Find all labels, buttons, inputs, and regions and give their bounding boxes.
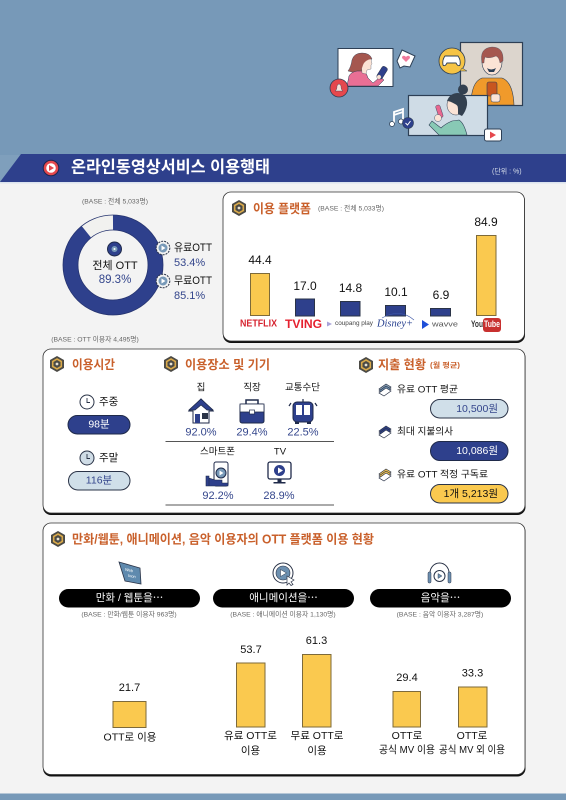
logo: Wavve [422,320,458,329]
icon: clock weekday [80,395,94,409]
max willingness value: 10,086원 [456,445,498,457]
icon: house [189,399,213,423]
bar chart: music: 33.3 [462,668,483,680]
logo: Netflix: NETFLIX [240,318,277,330]
icon: webtoon: toon [128,573,136,579]
icon: money [379,469,391,481]
paid average label: 유료 OTT 평균 [397,384,458,396]
bar chart: 10.1 [384,285,408,299]
bar chart: animation: 유료 OTT로 [224,730,277,742]
bar chart: webtoon [104,682,157,744]
logo: Disney+: Disney+ [376,318,413,330]
title band [0,154,566,184]
footer band [0,794,566,800]
icon: notification bell [330,79,348,97]
place values: 92.0% [185,426,217,438]
section: places and devices: 교통수단 [285,382,320,394]
base note bottom: (BASE : OTT 이용자 4,495명) [51,334,139,344]
illustration: people using video services [330,42,522,141]
icon: music headphones [428,563,451,583]
icon: free [156,274,170,288]
section: places and devices: 29.4% [236,426,268,438]
weekend label: 주말 [99,452,119,464]
label pill: music: 음악을⋯ [421,592,460,604]
panel: webtoon, animation, music users [43,523,526,776]
heading: 지출 현황 [378,357,426,372]
base notes: (BASE : 음악 이용자 3,287명) [397,610,483,618]
base notes: (BASE : 애니메이션 이용자 1,130명) [230,610,336,618]
icon: money [379,426,391,438]
unit note: (단위 : %) [492,166,522,176]
logo: Coupang Play: coupang play [335,321,373,327]
icon: disc [108,242,122,256]
place labels: 집 [197,382,205,394]
header background [0,0,566,155]
icon: play tag [484,129,502,141]
base notes [81,610,483,618]
heading: 만화/웹툰, 애니메이션, 음악 이용자의 OTT 플랫폼 이용 현황 [72,532,374,546]
weekend value: 116분 [86,474,113,486]
bar chart: animation: 이용 [307,745,327,757]
bar chart: 44.4 [248,253,272,267]
icon: bus [289,399,317,424]
heading [378,357,460,372]
icon: clock weekend [80,451,94,465]
logo: YouTube [471,318,501,332]
section: places and devices [164,356,334,505]
base notes: (BASE : 만화/웹툰 이용자 963명) [81,610,177,618]
icon: section badge [359,357,373,373]
heading: 이용시간 [72,358,115,372]
section: usage time [50,356,130,490]
icon: check badge [402,118,414,128]
label pill: webtoon [59,589,200,608]
bar chart: 17.0 [293,279,317,293]
panel: total OTT donut [51,196,212,344]
bar chart: 6.9 [433,288,450,302]
paid average value [430,400,508,418]
paid label: 유료OTT [174,241,212,254]
section: places and devices: TV [274,446,287,458]
bar chart: music: OTT로 [457,730,488,742]
icon: section badge [51,531,65,547]
logo: Tving: TVING [285,317,322,331]
free value: 85.1% [174,290,205,302]
free label: 무료OTT [174,275,212,287]
label pill: animation [213,589,354,608]
logo: YouTube: You [471,319,483,330]
icon: webtoon: Web [124,567,134,573]
icon: briefcase [240,400,264,423]
total value: 89.3% [99,274,131,286]
max willingness value [430,442,508,460]
bar chart: webtoon: OTT로 이용 [104,732,157,744]
fair price value [430,484,508,503]
donut chart [63,215,163,315]
bar chart: music: 공식 MV 이용 [379,744,435,756]
bar chart: animation: 61.3 [306,635,327,647]
paid value: 53.4% [174,257,205,269]
icon: money [379,384,391,396]
weekday value: 98분 [88,418,110,430]
bar chart [248,215,498,316]
icon: webtoon [119,562,141,584]
icon: heart bubble [397,50,415,68]
icon: paid [156,241,170,255]
label pill: animation: 애니메이션을⋯ [249,592,318,604]
section: places and devices: 28.9% [263,490,295,502]
device values: 92.2% [202,490,234,502]
device labels: 스마트폰 [200,446,235,458]
bar chart: animation [224,635,344,757]
panel: platforms [223,192,525,343]
bar chart: music: OTT로 [392,730,423,742]
bar chart: music: 29.4 [396,672,418,684]
fair price value: 1개 5,213원 [444,488,498,500]
logo: YouTube: Tube [484,319,500,330]
icon: section badge [164,356,178,372]
icon: music note [390,109,404,126]
icon: animation play [273,563,294,586]
weekday label: 주중 [99,396,119,408]
label pill: webtoon: 만화 / 웹툰을⋯ [96,592,163,604]
icon: section badge [50,356,64,372]
panel: usage time, places, spending [43,349,526,515]
bar chart: music: 공식 MV 외 이용 [439,744,505,756]
label pill: music [370,589,511,608]
bar chart: music [379,668,505,756]
section: places and devices: 22.5% [287,426,319,438]
bar chart: webtoon: 21.7 [119,682,140,694]
base note top: (BASE : 전체 5,033명) [82,196,148,206]
bar chart: animation: 53.7 [240,644,262,656]
logo: Disney+ [376,313,414,330]
heading: 이용장소 및 기기 [185,357,270,372]
woman with pink phone frame [408,84,488,136]
woman with phone frame [338,48,393,86]
icon: TV [268,462,291,484]
bar chart: 14.8 [339,281,363,295]
icon: smartphone [206,462,228,486]
bar chart: animation: 이용 [241,745,260,757]
heading: 온라인동영상서비스 이용행태 [71,156,270,176]
max willingness label: 최대 지불의사 [397,426,453,438]
logo: Wavve: wavve [431,320,458,328]
bar chart: animation: 무료 OTT로 [291,730,344,742]
paid average value: 10,500원 [456,403,498,415]
total label: 전체 OTT [92,259,138,272]
fair price label: 유료 OTT 적정 구독료 [397,468,488,480]
icon: section badge [232,200,246,216]
heading: (월 평균) [430,360,460,370]
icon: game controller bubble [439,48,467,74]
section: places and devices: 직장 [243,382,261,394]
base note: (BASE : 전체 5,033명) [318,204,384,212]
man with phone frame [460,42,522,106]
heading: 이용 플랫폼 [253,202,311,216]
bar chart: 84.9 [474,215,498,229]
icon: play button [43,160,59,176]
section: spending [359,357,508,503]
